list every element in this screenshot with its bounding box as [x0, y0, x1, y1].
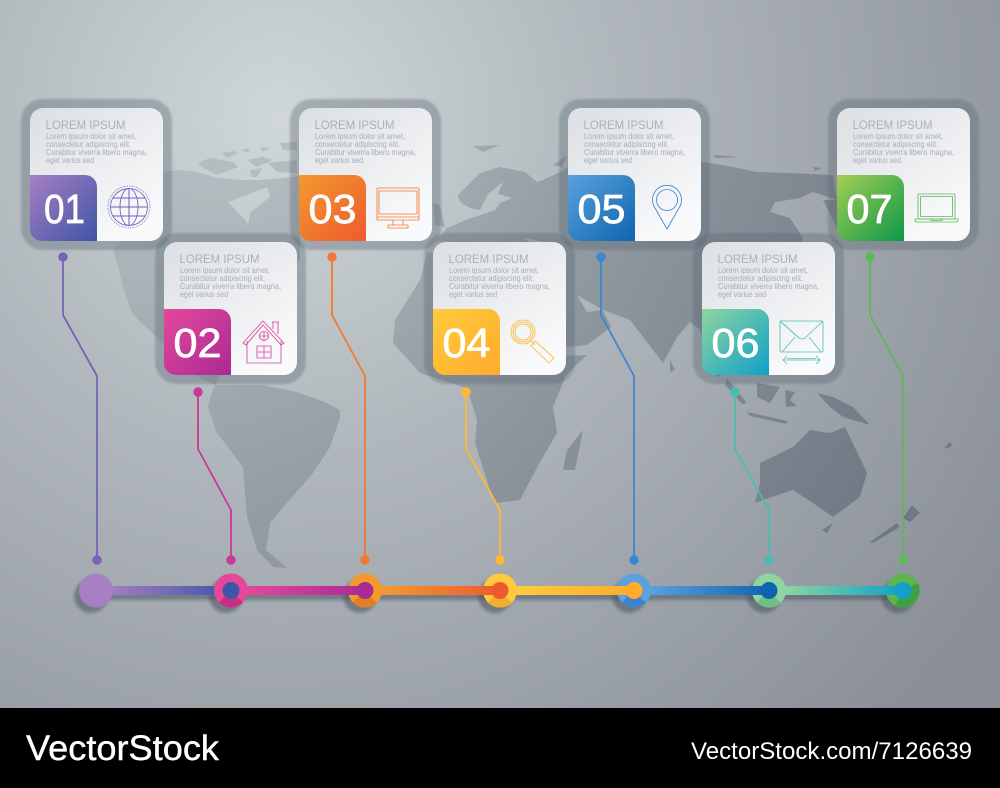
node 5 — [617, 574, 651, 608]
body text: eget varius sed — [46, 155, 94, 165]
body text — [853, 131, 954, 165]
body text: eget varius sed — [315, 155, 363, 165]
body text: consectetur adipiscing elit. — [449, 273, 534, 283]
number: 04 — [442, 320, 490, 366]
body text — [449, 265, 550, 299]
body text: consectetur adipiscing elit. — [853, 139, 938, 149]
body text: Lorem ipsum dolor sit amet, — [584, 131, 674, 141]
body text: Lorem ipsum dolor sit amet, — [180, 265, 270, 275]
icon: monitor — [377, 188, 419, 228]
timeline — [74, 574, 920, 613]
icon: house — [243, 321, 284, 363]
segment 3 — [380, 586, 500, 595]
body text: eget varius sed — [584, 155, 632, 165]
body text — [718, 265, 819, 299]
icon: magnifier — [511, 320, 554, 363]
body text: Lorem ipsum dolor sit amet, — [853, 131, 943, 141]
node 2 — [214, 574, 248, 608]
body text: Lorem ipsum dolor sit amet, — [315, 131, 405, 141]
number: 06 — [712, 320, 760, 366]
panel: card 06 — [702, 242, 835, 375]
world map — [113, 142, 952, 568]
heading: LOREM IPSUM — [314, 118, 394, 132]
body text: eget varius sed — [449, 289, 497, 299]
footer url: VectorStock.com/7126639 — [691, 738, 972, 765]
footer logo: VectorStock — [26, 729, 220, 768]
body text: consectetur adipiscing elit. — [180, 273, 265, 283]
panel: card 02 — [164, 242, 297, 375]
body text: Lorem ipsum dolor sit amet, — [46, 131, 136, 141]
number: 05 — [578, 186, 626, 232]
panel: card 05 — [568, 108, 701, 241]
node 7 — [886, 574, 920, 608]
body text — [584, 131, 685, 165]
body text — [180, 265, 281, 299]
icon: envelope — [780, 321, 823, 364]
node centres — [222, 582, 912, 599]
body text: Lorem ipsum dolor sit amet, — [718, 265, 808, 275]
body text: eget varius sed — [718, 289, 766, 299]
number: 07 — [846, 186, 892, 232]
icon: laptop — [915, 194, 958, 222]
card halos — [21, 99, 979, 384]
body text: Curabitur viverra libero magna, — [449, 281, 550, 291]
body text — [46, 131, 147, 165]
number: 01 — [44, 186, 85, 232]
body text: Curabitur viverra libero magna, — [180, 281, 281, 291]
panel: card 03 — [299, 108, 432, 241]
panel: card 01 — [30, 108, 163, 241]
panel: card 07 — [837, 108, 970, 241]
segment 6 — [784, 586, 904, 595]
number: 03 — [308, 186, 356, 232]
leader line 05 — [596, 252, 639, 565]
body text: Curabitur viverra libero magna, — [46, 147, 147, 157]
body text: consectetur adipiscing elit. — [718, 273, 803, 283]
leader line 06 — [730, 387, 774, 565]
number: 02 — [174, 320, 222, 366]
body text: Curabitur viverra libero magna, — [584, 147, 685, 157]
body text: Lorem ipsum dolor sit amet, — [449, 265, 539, 275]
heading: LOREM IPSUM — [46, 118, 126, 132]
leader line 04 — [461, 387, 505, 565]
body text: consectetur adipiscing elit. — [315, 139, 400, 149]
body text — [315, 131, 416, 165]
node 4 — [483, 574, 517, 608]
leader line 03 — [327, 252, 370, 565]
body text: Curabitur viverra libero magna, — [853, 147, 954, 157]
heading: LOREM IPSUM — [180, 252, 260, 266]
leader line 01 — [58, 252, 102, 565]
leader line 07 — [865, 252, 908, 565]
heading: LOREM IPSUM — [852, 118, 932, 132]
leader line 02 — [193, 387, 236, 565]
node 3 — [348, 574, 382, 608]
segment 1 — [105, 586, 233, 595]
heading: LOREM IPSUM — [584, 118, 664, 132]
node 1 — [79, 574, 113, 608]
heading: LOREM IPSUM — [718, 252, 798, 266]
panel: card 04 — [433, 242, 566, 375]
timeline shadows — [74, 579, 915, 613]
heading: LOREM IPSUM — [448, 252, 528, 266]
node 6 — [752, 574, 786, 608]
body text: Curabitur viverra libero magna, — [718, 281, 819, 291]
footer band — [0, 708, 1000, 788]
segment 2 — [246, 586, 366, 595]
body text: Curabitur viverra libero magna, — [315, 147, 416, 157]
body text: consectetur adipiscing elit. — [584, 139, 669, 149]
icon: location pin — [652, 185, 682, 229]
segment 4 — [515, 586, 635, 595]
body text: eget varius sed — [180, 289, 228, 299]
segment 5 — [649, 586, 769, 595]
body text: eget varius sed — [853, 155, 901, 165]
body text: consectetur adipiscing elit. — [46, 139, 131, 149]
icon: globe — [108, 186, 150, 228]
